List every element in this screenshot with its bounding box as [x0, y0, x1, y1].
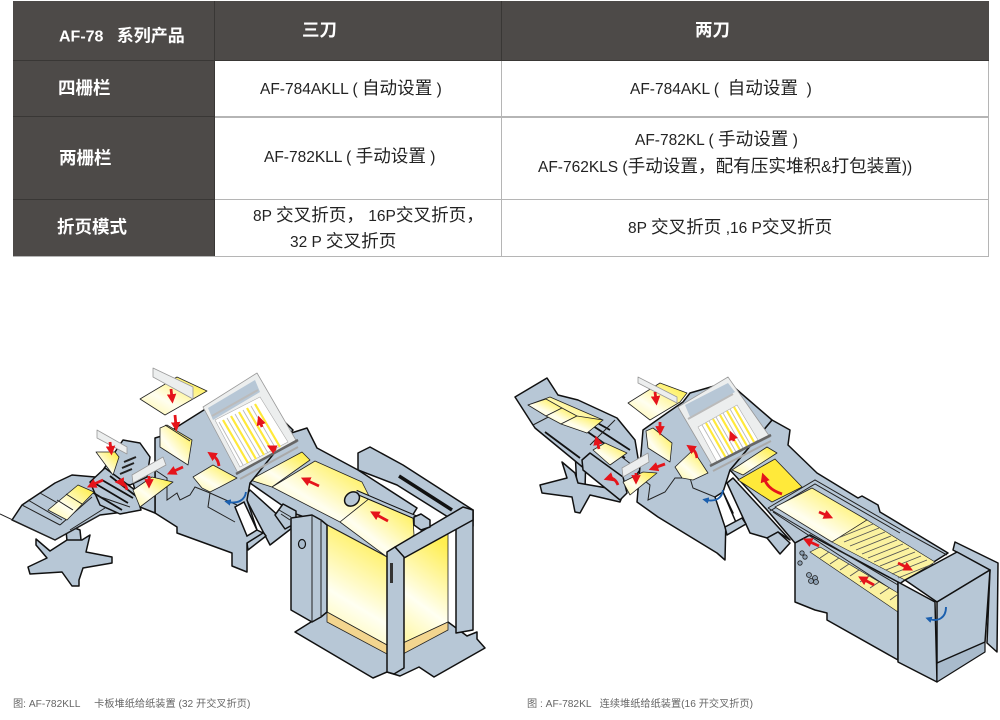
paper sheet 3 [340, 498, 414, 557]
interior [215, 397, 288, 467]
top paper [140, 377, 207, 415]
top bar [153, 368, 193, 399]
front frame beam [395, 507, 473, 558]
cell: three knife folding modes: 8P 交叉折页， 16P交叉折页， [253, 205, 484, 225]
column divider [501, 61, 502, 257]
right machine: AF-782KL [515, 377, 998, 682]
middle sheet [593, 443, 627, 465]
end box top [905, 552, 990, 602]
curved paper sheet [193, 465, 237, 492]
rear rail [399, 476, 452, 510]
grey panel [208, 380, 260, 420]
row edge in dark column [13, 116, 215, 117]
large sheet [738, 459, 802, 502]
small sheet [732, 447, 777, 475]
roller [342, 489, 362, 509]
right stack side [403, 533, 448, 643]
delivery folder block [90, 468, 141, 514]
right post [456, 510, 473, 633]
left folded paper [96, 452, 119, 475]
top paper [628, 383, 687, 420]
row label: four buckle: 四栅栏 [58, 78, 110, 98]
paper sheet 2 [272, 461, 370, 522]
control box [275, 504, 296, 529]
tower knob [298, 540, 306, 548]
delivery table [12, 475, 140, 540]
caption left: 图: AF-782KLL 卡板堆纸给纸装置 (32 开交叉折页) [13, 699, 250, 710]
strut [725, 518, 746, 535]
rails [688, 394, 733, 419]
cell: two knife folding modes: 8P 交叉折页 ,16 P交叉折页 [628, 217, 832, 237]
left machine: AF-782KLL [0, 368, 485, 678]
cell: AF-782KL: AF-782KL ( 手动设置 ) [635, 129, 798, 149]
lower striped belt [810, 547, 898, 612]
star post [66, 527, 82, 552]
top feeding sheet [775, 488, 867, 542]
inclined support arm [245, 490, 292, 545]
frame outer [203, 373, 297, 473]
left bar [97, 430, 127, 454]
end box lower [937, 640, 985, 682]
caption right: 图 : AF-782KL 连续堆纸给纸装置(16 开交叉折页) [527, 699, 753, 710]
header bottom edge [13, 60, 989, 61]
control box [767, 532, 790, 554]
cell: AF-762KLS: AF-762KLS (手动设置，配有压实堆积&打包装置)) [538, 156, 912, 176]
red arrows [597, 392, 908, 585]
main body [155, 400, 293, 572]
buckle frame [678, 377, 771, 471]
left stack side [327, 525, 387, 645]
header: product series: AF-78 系列产品 [59, 26, 185, 46]
left tower post [291, 515, 327, 622]
delivery sheets [528, 397, 603, 433]
delivery sheets [48, 485, 94, 520]
row divider [215, 199, 989, 200]
star base [28, 535, 112, 586]
fold paper [623, 472, 657, 495]
conveyor platform [250, 428, 417, 557]
left folding block [103, 440, 150, 485]
first column dark background [13, 1, 215, 256]
cell: AF-784AKLL: AF-784AKLL ( 自动设置 ) [260, 78, 442, 98]
main body [637, 382, 772, 560]
buckle frame [203, 373, 298, 479]
rails [212, 390, 258, 416]
roller shaft [356, 492, 417, 518]
stripes [706, 407, 754, 458]
header: three knives: 三刀 [302, 20, 337, 40]
cell: AF-784AKL: AF-784AKL ( 自动设置 ) [630, 78, 812, 98]
fold paper [133, 477, 173, 507]
cell: AF-782KLL: AF-782KLL ( 手动设置 ) [264, 146, 435, 166]
right border [988, 61, 989, 257]
row label: two buckle: 两栅栏 [59, 148, 112, 168]
paper sheet 1 [250, 452, 310, 487]
star post [575, 450, 586, 490]
back plate [953, 542, 998, 652]
end box front [937, 570, 990, 663]
table: AF-78 series products [13, 1, 989, 257]
row label: folding mode: 折页模式 [57, 217, 127, 237]
cabinet [795, 535, 898, 660]
left stack pallet [327, 612, 387, 654]
bottom border [13, 256, 989, 257]
rear frame [358, 447, 473, 526]
grey panel [685, 383, 735, 417]
row divider [215, 116, 989, 118]
upper striped belt [832, 520, 935, 580]
base plate [295, 612, 485, 678]
star base [540, 462, 622, 513]
front post [387, 547, 404, 674]
body slot [715, 492, 738, 533]
second column edge in header [501, 1, 502, 61]
inclined arm [727, 478, 790, 540]
header row dark background [13, 1, 989, 61]
long conveyor back [730, 420, 948, 585]
blue arrows [706, 490, 723, 501]
mid bar [622, 453, 649, 477]
mid bar [132, 457, 166, 483]
header: two knives: 两刀 [695, 20, 730, 40]
folded yellow paper [160, 425, 192, 465]
curved paper sheet [675, 450, 708, 480]
end box blue arrow [929, 607, 946, 620]
middle folding unit [582, 453, 627, 500]
folder connector block [133, 470, 155, 513]
cell: 32P folding mode: 32 P 交叉折页 [290, 231, 396, 251]
column edge in header [214, 1, 215, 256]
row edge in dark column [13, 199, 215, 200]
roller end block [414, 514, 430, 530]
stripes [223, 404, 280, 463]
blue arrows [228, 492, 246, 503]
end box left face [898, 582, 937, 682]
frame outer [678, 377, 770, 465]
delivery conveyor [515, 378, 640, 490]
post controls [390, 563, 393, 583]
red arrows [92, 389, 388, 521]
strut [247, 532, 266, 550]
body slot [235, 502, 257, 536]
right stack pallet [403, 622, 448, 654]
interior [698, 405, 758, 462]
cabinet controls [798, 551, 818, 584]
top bar [638, 377, 677, 403]
rail frame [768, 480, 947, 593]
folded yellow paper [646, 428, 672, 462]
